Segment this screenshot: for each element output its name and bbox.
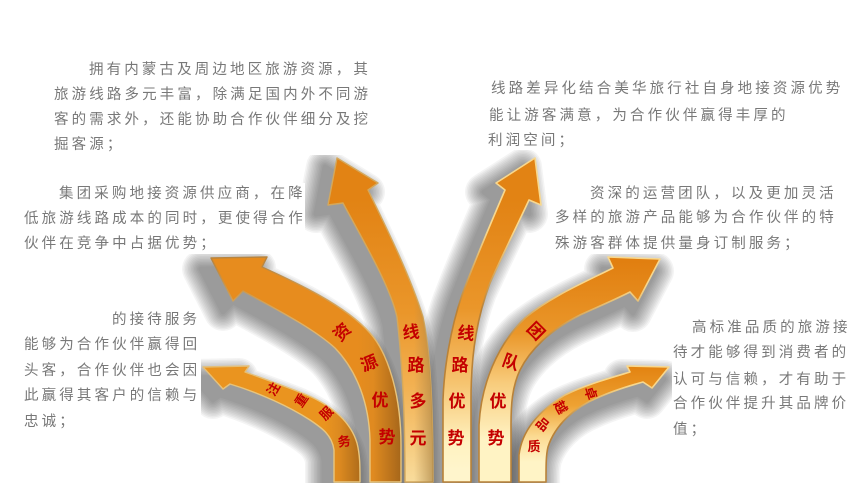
- text block: 资源优势: 伙伴在竞争中占据优势；: [24, 232, 218, 253]
- arrow: 品质卓越: 越: [551, 398, 570, 417]
- text block: 品质卓越: 高标准品质的旅游接: [692, 320, 851, 336]
- text block: 注重服务: 忠诚；: [24, 410, 77, 431]
- arrow: 线路多元: [328, 158, 433, 482]
- arrow: 资源优势: 势: [378, 428, 396, 447]
- arrow: 团队优势: [479, 257, 660, 482]
- text block: 线路多元: 掘客源；: [54, 133, 124, 154]
- text block: 线路多元: 旅游线路多元丰富，除满足国内外不同游: [54, 83, 371, 104]
- text block: 线路优势: 能让游客满意，为合作伙伴赢得丰厚的: [489, 104, 789, 125]
- text block: 注重服务: 此赢得其客户的信赖与: [24, 388, 200, 404]
- text block: 线路优势: 利润空间；: [488, 129, 576, 150]
- arrow: 注重服务: 务: [337, 433, 352, 450]
- text block: 线路多元: [54, 59, 370, 155]
- arrow: 线路优势: 路: [452, 356, 468, 375]
- text block: 注重服务: 头客，合作伙伴也会因: [24, 359, 200, 380]
- text block: 资源优势: 集团采购地接资源供应商，在降: [59, 182, 306, 203]
- arrow: 品质卓越: 品: [533, 414, 552, 434]
- arrow: 资源优势: 优: [372, 391, 388, 410]
- text block: 注重服务: 能够为合作伙伴赢得回: [24, 337, 200, 353]
- text block: 资源优势: [24, 183, 305, 254]
- arrow: 品质卓越: [519, 366, 669, 482]
- arrow: 线路多元: 路: [408, 356, 424, 375]
- text block: 品质卓越: 合作伙伴提升其品牌价: [673, 396, 849, 412]
- text block: 团队优势: 资深的运营团队，以及更加灵活: [590, 182, 837, 203]
- arrow: 团队优势: 队: [500, 351, 522, 374]
- text block: 资源优势: 低旅游线路成本的同时，更使得合作: [24, 207, 306, 228]
- arrow: 线路优势: 优: [448, 392, 466, 411]
- arrow: 资源优势: 源: [358, 351, 381, 375]
- text block: 线路多元: 拥有内蒙古及周边地区旅游资源，其: [89, 58, 371, 79]
- text block: 线路优势: [488, 79, 841, 150]
- text block: 团队优势: 殊游客群体提供量身订制服务；: [555, 232, 802, 253]
- arrow: 注重服务: 重: [292, 391, 311, 410]
- arrow: 线路优势: 势: [448, 429, 464, 448]
- text block: 品质卓越: 待才能够得到消费者的: [673, 345, 849, 361]
- arrow: 资源优势: [211, 257, 401, 482]
- arrow: 注重服务: 注: [264, 380, 283, 399]
- text block: 团队优势: 多样的旅游产品能够为合作伙伴的特: [555, 210, 837, 226]
- arrow: 线路优势: [443, 158, 541, 482]
- arrow: 品质卓越: 质: [527, 439, 541, 454]
- arrow: 团队优势: 势: [488, 429, 504, 448]
- arrow: 注重服务: [203, 366, 360, 482]
- text block: 注重服务: 的接待服务: [112, 312, 200, 328]
- text block: 线路优势: 线路差异化结合美华旅行社自身地接资源优势: [491, 81, 843, 97]
- arrow: 线路多元: 元: [410, 429, 426, 448]
- arrow: 线路多元: 多: [410, 391, 426, 411]
- text block: 团队优势: [555, 183, 836, 254]
- arrow: 线路多元: 线: [402, 322, 420, 343]
- arrow: 注重服务: 服: [316, 403, 336, 423]
- text block: 注重服务: [24, 310, 201, 431]
- arrow: 品质卓越: 卓: [581, 385, 600, 402]
- text block: 品质卓越: 认可与信赖，才有助于: [673, 368, 849, 389]
- text block: 线路多元: 客的需求外，还能协助合作伙伴细分及挖: [54, 108, 371, 129]
- arrow: 线路优势: 线: [457, 323, 475, 344]
- arrow: 团队优势: 团: [523, 319, 548, 344]
- arrow: 团队优势: 优: [490, 392, 506, 411]
- text block: 品质卓越: [672, 318, 849, 439]
- arrow shadows: [193, 167, 664, 483]
- text block: 品质卓越: 值；: [673, 418, 708, 439]
- arrow: 资源优势: 资: [330, 320, 355, 345]
